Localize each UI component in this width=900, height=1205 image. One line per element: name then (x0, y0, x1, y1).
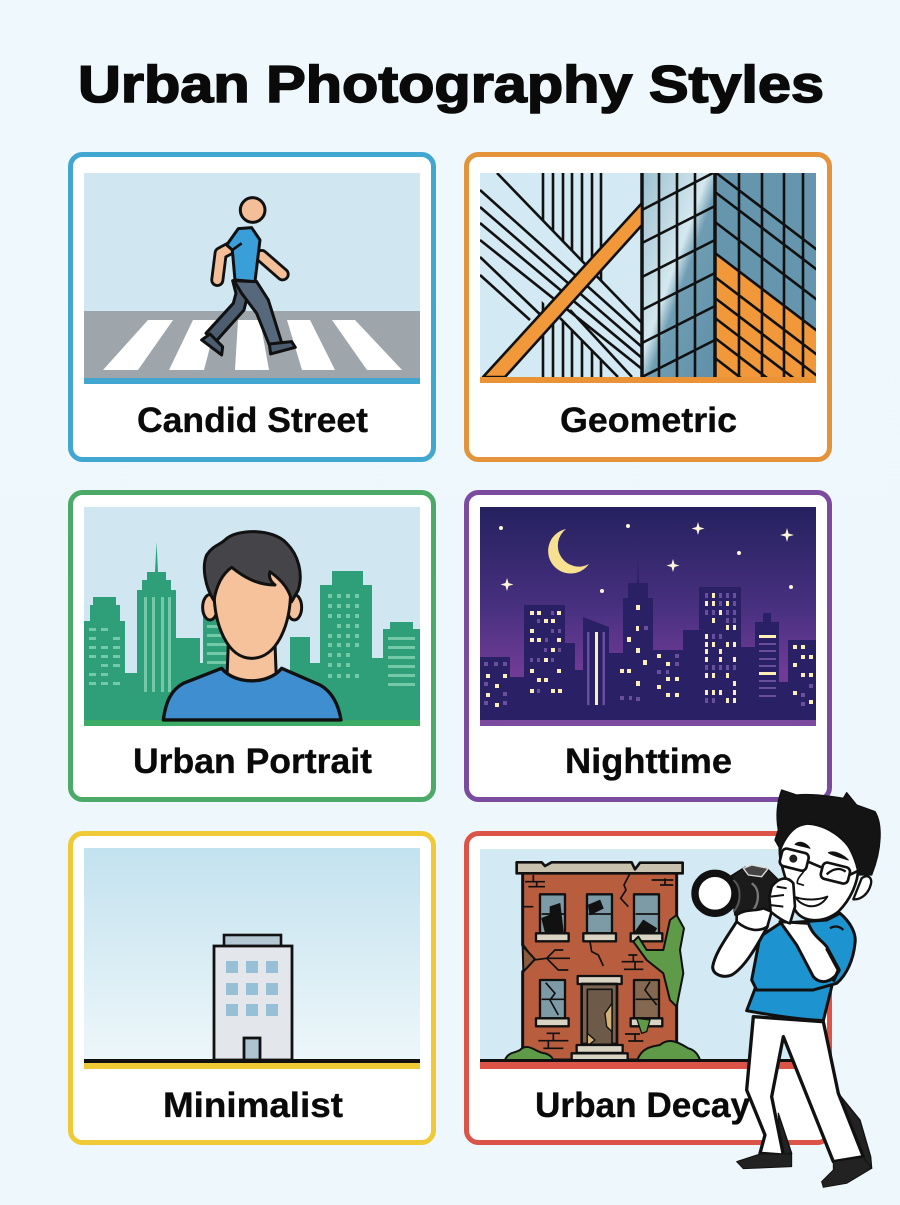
trousers and shoes (737, 980, 872, 1187)
character: photographer with camera (695, 790, 880, 1187)
card frame (70, 492, 434, 800)
illustration: single building (84, 848, 420, 1069)
panel: geometric (466, 154, 830, 460)
label: candid street: Candid Street (137, 401, 368, 440)
panel: minimalist (70, 834, 434, 1142)
stars (499, 522, 794, 593)
panel: candid street (70, 154, 434, 460)
illustration: portrait before skyline (84, 507, 420, 726)
card frame (466, 154, 830, 460)
illustration: decayed brick building (480, 849, 816, 1069)
illustration: pedestrian on crosswalk (84, 173, 420, 384)
illustration: geometric architecture (480, 172, 820, 385)
panel: urban decay (466, 834, 830, 1142)
card frame (70, 154, 434, 460)
icon: crescent moon (548, 529, 589, 574)
hands (737, 908, 772, 930)
label: urban portrait: Urban Portrait (133, 742, 372, 781)
label: geometric: Geometric (560, 401, 737, 440)
label: nighttime: Nighttime (565, 742, 732, 781)
upper body with head and camera (695, 790, 880, 990)
illustration: night skyline (480, 507, 816, 726)
panel: nighttime (466, 492, 830, 800)
label: minimalist: Minimalist (163, 1086, 343, 1125)
title: Urban Photography Styles (78, 56, 824, 114)
card frame (466, 834, 830, 1142)
label: urban decay: Urban Decay (535, 1086, 751, 1125)
card frame (70, 834, 434, 1142)
panel: urban portrait (70, 492, 434, 800)
camera (730, 867, 778, 915)
card frame (466, 492, 830, 800)
